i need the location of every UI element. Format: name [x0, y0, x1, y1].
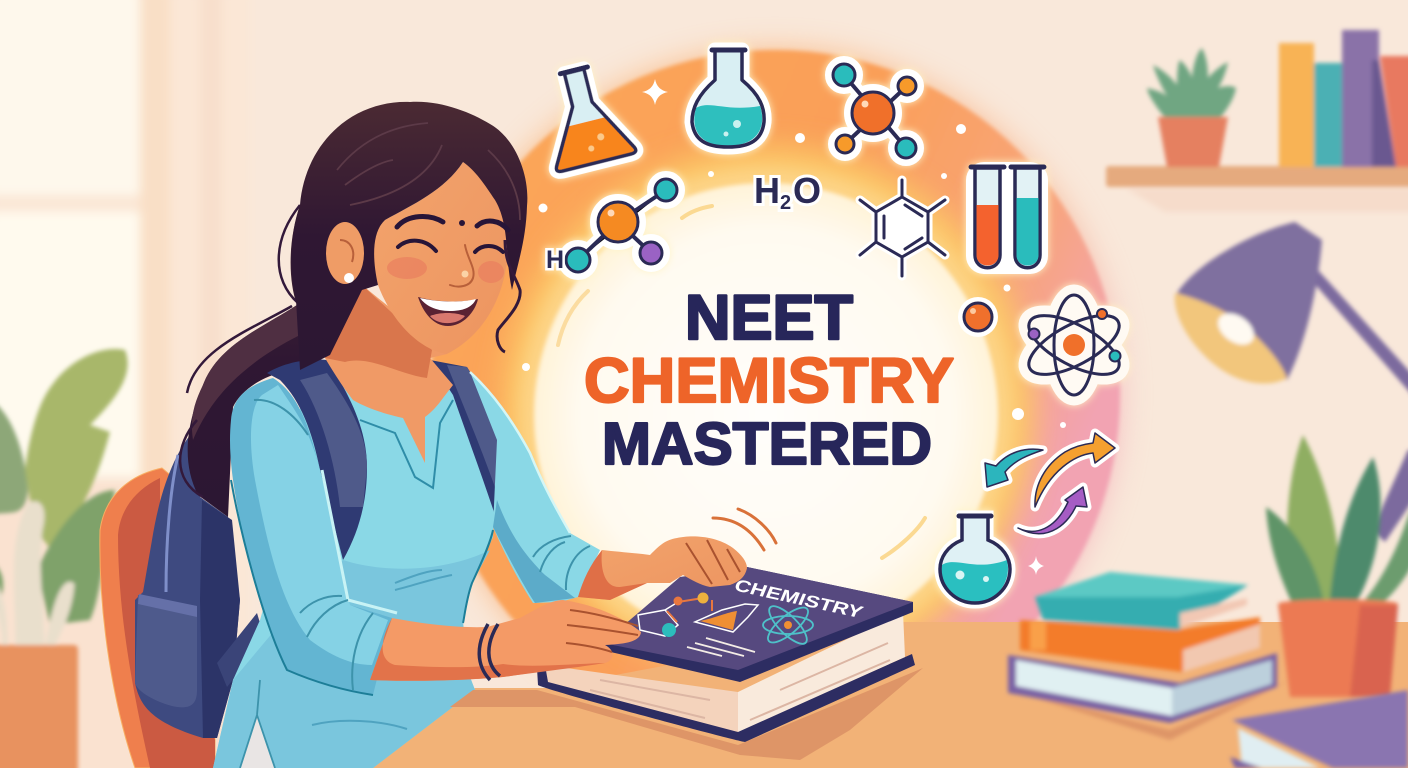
left forearm and hand — [370, 600, 641, 681]
icon: round flask — [692, 50, 764, 147]
window and curtain — [0, 0, 250, 768]
neck — [325, 285, 453, 488]
orange book — [1020, 617, 1260, 672]
orange arrow — [1035, 433, 1115, 507]
arrow outlines — [985, 433, 1115, 534]
icon: test tubes — [966, 162, 1048, 274]
icon: H2O label: O — [793, 170, 821, 211]
title: CHEMISTRY — [584, 346, 954, 416]
title — [584, 283, 954, 477]
white central disc — [534, 183, 998, 647]
book — [450, 567, 923, 760]
facial features — [387, 217, 508, 287]
teal arrow — [985, 449, 1043, 487]
student hands — [370, 509, 776, 681]
face — [372, 162, 508, 354]
laughing mouth — [418, 297, 478, 326]
front hair — [291, 102, 527, 370]
icon: bottom round flask — [940, 516, 1010, 603]
icon: orange ball — [958, 297, 998, 337]
student — [100, 102, 600, 768]
backpack straps — [267, 360, 498, 560]
icon: H2O label: 2 — [780, 192, 791, 214]
icon: molecule left: H — [546, 246, 564, 274]
chemistry halo behind title — [427, 47, 1123, 743]
left potted plant — [0, 349, 128, 768]
page block — [545, 665, 738, 732]
icon: H2O label — [754, 170, 821, 214]
icon: H2O label: H — [754, 170, 780, 211]
back cover — [537, 654, 915, 742]
right forearm and hand — [578, 536, 747, 600]
purple arrow — [1018, 487, 1087, 534]
right potted plant — [1266, 435, 1408, 697]
foreground purple book — [1230, 690, 1408, 768]
title: NEET — [685, 283, 853, 353]
book shadow — [450, 668, 923, 760]
cover lines — [687, 638, 755, 656]
ear — [326, 222, 364, 284]
icon: reaction arrows — [985, 433, 1115, 534]
table — [370, 622, 1408, 768]
backpack — [135, 427, 265, 738]
icon: atom — [1015, 291, 1133, 399]
hair strands — [180, 205, 300, 497]
desk lamp — [1175, 222, 1408, 542]
left sleeve — [230, 378, 397, 695]
icon: benzene ring — [860, 180, 945, 276]
bracelets — [479, 624, 500, 680]
chair — [100, 468, 215, 768]
cover flask — [695, 604, 758, 632]
teal book — [1035, 572, 1248, 630]
wall shelf with books and plant — [1106, 30, 1408, 212]
sparkle dots — [522, 79, 1066, 575]
front cover — [602, 567, 913, 682]
cover title: CHEMISTRY — [731, 575, 867, 622]
icon: molecule top right — [832, 63, 917, 159]
cover atom — [763, 601, 813, 649]
cover molecule — [638, 592, 712, 637]
long hair back — [188, 200, 380, 517]
right sleeve — [470, 372, 600, 603]
title: MASTERED — [602, 411, 932, 477]
icon: conical flask — [534, 60, 636, 172]
motion arcs — [713, 509, 776, 550]
stacked books — [1008, 572, 1408, 768]
kurta torso — [213, 360, 497, 768]
bottom purple book — [1008, 653, 1290, 740]
icon: molecule left — [546, 178, 678, 274]
